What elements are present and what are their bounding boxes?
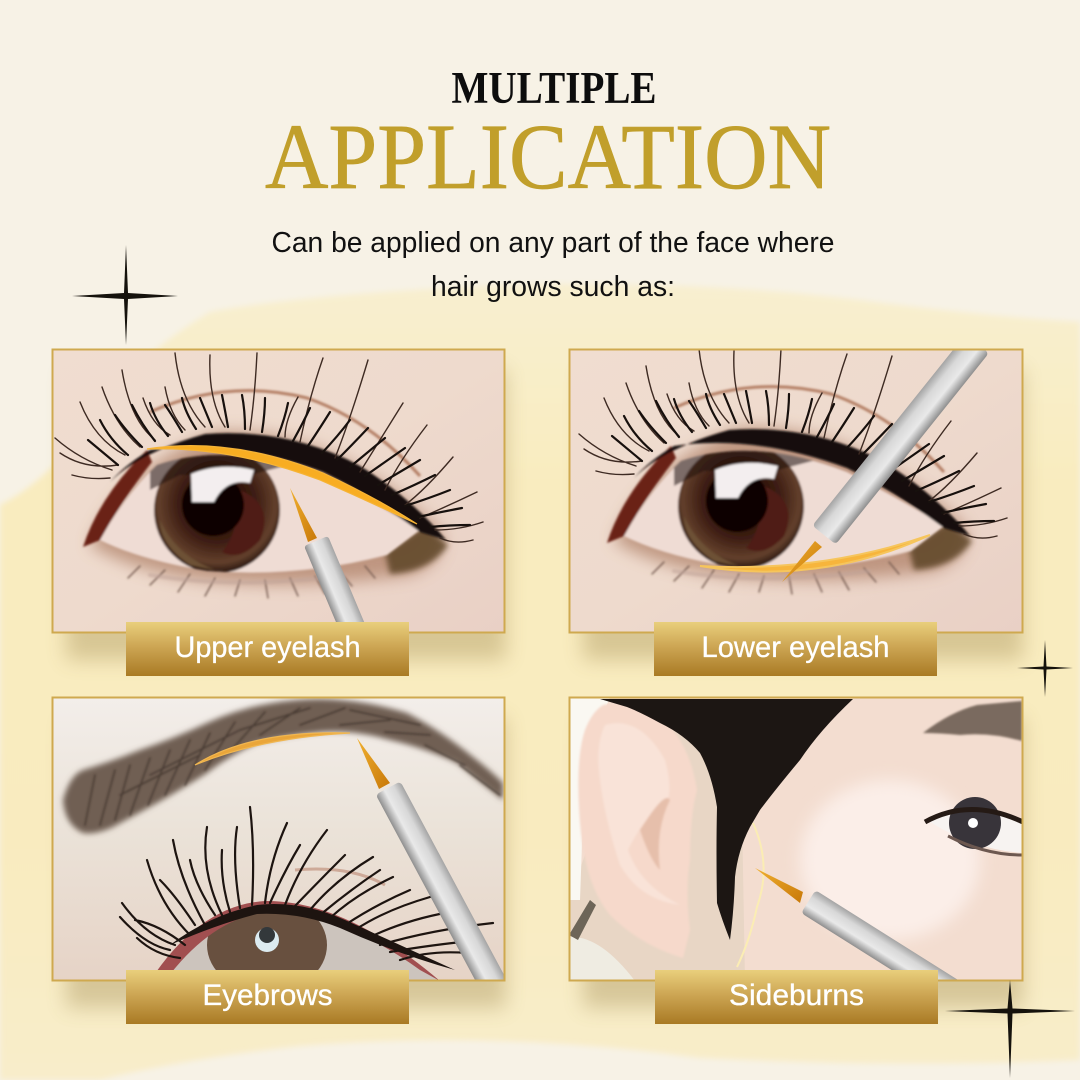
- panel: eyebrows: [52, 697, 511, 1002]
- icon: sparkle right: [1017, 640, 1073, 697]
- icon: sparkle left: [72, 245, 178, 345]
- collar: [569, 937, 635, 981]
- icon: sparkle bottom right: [945, 980, 1075, 1078]
- yellow brush background: [0, 284, 1080, 1080]
- gold highlight on upper lid: [147, 446, 417, 524]
- label: eyebrows: [126, 970, 409, 1024]
- title: MULTIPLE: MULTIPLE: [452, 63, 656, 113]
- panel: upper eyelash: [52, 349, 505, 638]
- gold highlight line: [737, 823, 764, 967]
- white background corner: [569, 697, 610, 900]
- subtitle: Can be applied on any part of the face where: [272, 227, 834, 259]
- applicator brush: [357, 738, 504, 980]
- applicator brush: [782, 334, 989, 582]
- eye with lashes: [120, 807, 493, 993]
- label: upper eyelash: Upper eyelash: [174, 631, 360, 664]
- eyebrow: [923, 701, 1022, 741]
- title: APPLICATION: APPLICATION: [265, 106, 831, 209]
- applicator brush: [755, 868, 958, 980]
- eye: [925, 797, 1023, 855]
- gold highlight on brow: [195, 733, 350, 765]
- gold highlight on lower lid: [700, 535, 930, 572]
- subtitle: hair grows such as:: [431, 271, 675, 303]
- applicator brush: [290, 488, 364, 622]
- neck and behind-ear skin: [570, 732, 744, 980]
- panel shadows: [66, 370, 1023, 1008]
- label: upper eyelash: [126, 622, 409, 676]
- hair sideburn: [600, 699, 853, 940]
- highlight on cheek: [800, 780, 980, 940]
- panel: lower eyelash: [569, 334, 1023, 633]
- label: lower eyelash: [654, 622, 937, 676]
- subtitle: [272, 227, 834, 303]
- ear: [578, 703, 697, 958]
- eyebrow: [63, 699, 503, 833]
- label: eyebrows: Eyebrows: [202, 979, 332, 1012]
- label: sideburns: [655, 970, 938, 1024]
- panel: sideburns: [568, 696, 1024, 982]
- label: lower eyelash: Lower eyelash: [702, 631, 890, 664]
- label: sideburns: Sideburns: [729, 979, 864, 1012]
